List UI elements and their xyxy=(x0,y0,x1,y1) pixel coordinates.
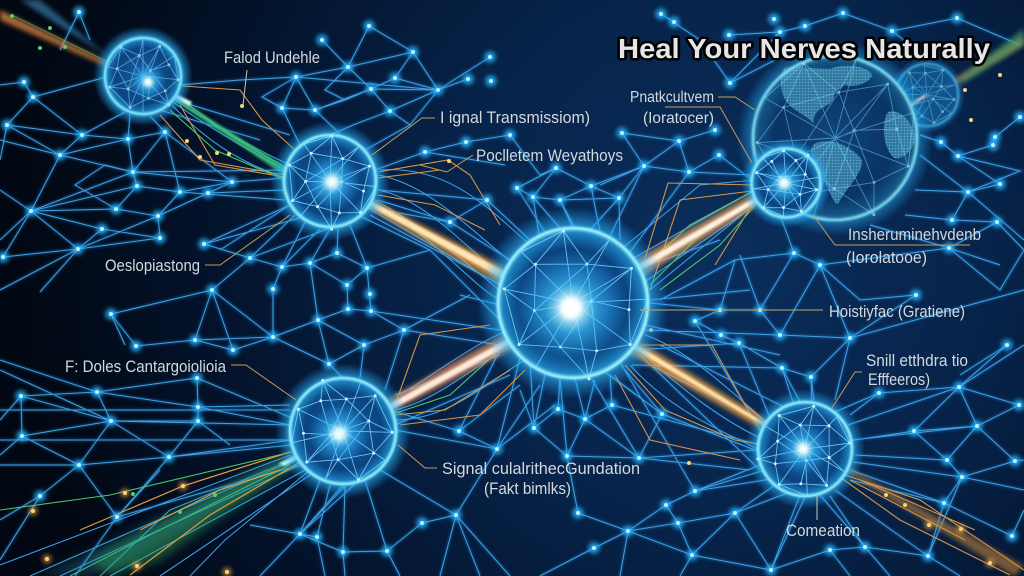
label: Signal Transmission xyxy=(372,109,590,155)
beam: second sphere to centre xyxy=(328,177,568,318)
label: Oeslopiastong: Oeslopiastong xyxy=(105,257,200,275)
label: Doles Cantargoiolioia: F: Doles Cantargoiolioia xyxy=(65,358,227,376)
beam: lower left fibre bundle xyxy=(40,432,343,576)
label: Insheruminehvdenb: Insheruminehvdenb xyxy=(848,226,981,244)
label: Oeslopiastong xyxy=(105,215,290,275)
label: Doles Cantargoiolioia xyxy=(65,358,296,400)
label: Snill etthdra tio: Efffeeros) xyxy=(868,371,930,389)
label: Snill etthdra tio xyxy=(832,352,968,408)
sphere: small upper right xyxy=(889,57,965,133)
label: Pnatkcultvem xyxy=(630,89,755,163)
label: Comeation: Comeation xyxy=(786,522,860,540)
label: Comeation xyxy=(786,495,860,540)
label: Insheruminehvdenb: (Iorolatooe) xyxy=(846,249,927,267)
globe continents xyxy=(781,66,916,204)
label: Pnatkcultvem: Pnatkcultvem xyxy=(630,89,714,106)
sphere: lower right xyxy=(744,389,866,509)
sphere: upper centre left xyxy=(268,118,392,244)
label: Falod Undehle: Falod Undehle xyxy=(224,49,320,67)
label: Pnatkcultvem: (Ioratocer) xyxy=(643,110,714,127)
label: Falod Undehle xyxy=(224,49,320,105)
beam: upper right sphere outward xyxy=(925,28,1024,101)
title: Heal Your Nerves Naturally xyxy=(618,33,991,64)
label: Signal culalrithecGundation xyxy=(398,445,640,498)
beam: centre to lower right sphere xyxy=(564,300,1024,576)
beam: centre to lower left sphere xyxy=(336,300,576,438)
label: Insheruminehvdenb xyxy=(813,215,981,267)
sphere: right front xyxy=(741,138,831,228)
beam: upper left into first sphere xyxy=(0,0,110,68)
label: Signal Transmission: I ignal Transmissiom) xyxy=(440,109,590,127)
beam: centre to right sphere xyxy=(564,177,788,316)
sphere: large centre xyxy=(476,205,670,401)
globe xyxy=(737,40,933,236)
label: Poclletem Weyathoys xyxy=(420,147,623,172)
label: Hoistiyfac (Gratiene): Hoistiyfac (Gratiene) xyxy=(829,303,965,321)
sphere: lower left xyxy=(275,363,411,499)
label: Snill etthdra tio: Snill etthdra tio xyxy=(866,352,968,370)
beam: first sphere to second xyxy=(147,78,290,176)
sphere: upper left xyxy=(93,26,193,126)
label: Signal culalrithecGundation: Signal culalrithecGundation xyxy=(442,460,640,478)
label: Poclletem Weyathoys: Poclletem Weyathoys xyxy=(476,147,623,165)
label: Signal culalrithecGundation: (Fakt bimlks) xyxy=(484,480,571,498)
